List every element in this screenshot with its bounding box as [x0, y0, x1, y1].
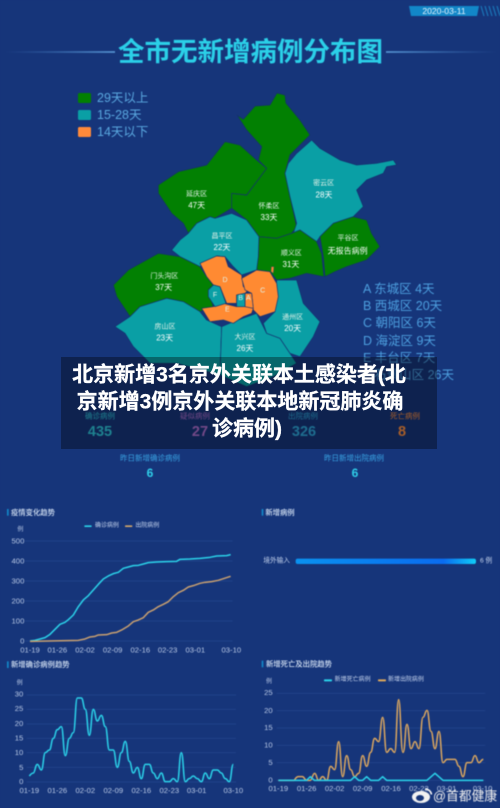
summary stats: 昨日新增确诊病例 — [120, 452, 180, 462]
district labels: 昌平区 — [212, 232, 232, 240]
district labels: 大兴区 — [235, 332, 255, 341]
district labels: 无报告病例 — [328, 245, 368, 255]
summary stats: 8 — [398, 424, 406, 440]
summary stats: 6 — [147, 466, 154, 480]
bar row — [263, 555, 493, 564]
summary stats: 死亡病例 — [390, 410, 420, 420]
headline overlay: 北京新增3名京外关联本土感染者(北 — [72, 362, 406, 386]
x axis — [269, 784, 492, 793]
panel: epidemic trend chart — [7, 508, 241, 654]
chart heading: 新增死亡及出院趋势 — [266, 659, 333, 668]
district labels: 37天 — [155, 283, 172, 292]
headline overlay — [61, 357, 437, 449]
x axis: 02-02 — [76, 786, 95, 795]
y axis: 0 — [268, 775, 273, 784]
district labels: 怀柔区 — [258, 201, 279, 210]
line: discharged — [30, 576, 231, 641]
title: 全市无新增病例分布图 — [118, 37, 383, 67]
district labels: 平谷区 — [337, 233, 358, 242]
chart heading: 新增病例 — [265, 508, 295, 517]
urban district list: B 西城区 20天 — [363, 299, 443, 313]
panel: new cases bar — [262, 508, 493, 564]
district labels: D — [222, 277, 228, 284]
urban district list: E 丰台区 7天 — [363, 350, 436, 365]
district labels: 22天 — [214, 243, 230, 252]
chart legend: 新增出院病例 — [388, 675, 424, 683]
district labels: 通州区 — [282, 312, 303, 321]
y axis: 0 — [19, 777, 23, 786]
y axis: 300 — [12, 576, 24, 585]
y axis: 10 — [15, 748, 23, 757]
map legend: 15-28天 — [97, 108, 142, 122]
line: new confirmed — [29, 698, 233, 782]
district: Xicheng — [237, 293, 245, 307]
district: Daxing — [220, 313, 297, 387]
chart legend — [84, 521, 159, 529]
panel: new deaths and discharges trend — [262, 659, 492, 793]
summary stats: 6 — [352, 466, 359, 480]
district labels: 23天 — [156, 333, 173, 342]
chart heading: 新增确诊病例趋势 — [11, 660, 70, 669]
enclave — [271, 267, 274, 273]
y axis — [264, 677, 273, 784]
icon: weibo — [412, 789, 432, 803]
x axis — [20, 645, 241, 654]
district labels: 33天 — [261, 213, 277, 222]
urban district list: D 海淀区 9天 — [363, 333, 436, 348]
district labels: 26天 — [237, 344, 253, 353]
y axis: 15 — [15, 733, 23, 742]
urban district list: F 石景山区 26天 — [363, 368, 454, 382]
district: Mentougou — [113, 253, 213, 317]
x axis: 02-23 — [160, 786, 179, 795]
chart legend: 出院病例 — [135, 521, 159, 529]
district: Tongzhou — [263, 280, 320, 357]
x axis: 01-19 — [20, 786, 39, 795]
watermark: Weibo: @首都健康 — [433, 788, 497, 804]
district labels: 20天 — [284, 324, 301, 333]
headline overlay: 诊病例) — [212, 418, 282, 440]
y axis: 例 — [17, 525, 23, 533]
summary stats — [85, 410, 420, 480]
district labels — [150, 178, 368, 353]
district: Fengtai — [202, 303, 253, 323]
district: Dongcheng — [245, 293, 253, 308]
district labels: 47天 — [188, 201, 205, 210]
district labels: 密云区 — [313, 178, 334, 187]
map of Beijing districts — [113, 93, 397, 387]
district labels: C — [260, 287, 265, 294]
summary stats: 确诊病例 — [85, 410, 115, 420]
urban district list: A 东城区 4天 — [363, 282, 435, 296]
x axis: 01-26 — [297, 784, 316, 793]
urban district list — [363, 282, 454, 382]
map legend — [78, 91, 148, 139]
y axis: 例 — [266, 677, 272, 685]
y axis: 25 — [264, 688, 273, 697]
x axis: 03-01 — [187, 786, 206, 795]
y axis: 15 — [264, 723, 273, 732]
x axis: 01-19 — [20, 645, 40, 654]
district: Shijingshan — [208, 285, 226, 307]
x axis: 02-16 — [381, 784, 401, 793]
x axis: 03-01 — [186, 645, 205, 654]
x axis: 02-16 — [131, 645, 150, 654]
district labels: E — [225, 306, 230, 313]
x axis: 02-09 — [104, 786, 123, 795]
chart legend: 确诊病例 — [95, 521, 119, 529]
district: Shunyi — [257, 230, 324, 280]
district: Haidian — [200, 256, 248, 303]
summary stats: 昨日新增出院病例 — [324, 452, 384, 462]
summary stats: 27 — [192, 424, 208, 440]
y axis: 25 — [15, 704, 23, 713]
district: Huairou — [232, 93, 310, 238]
y axis: 0 — [20, 636, 24, 645]
y axis: 例 — [17, 678, 23, 686]
district: Changping — [172, 213, 259, 275]
bar row: 6 例 — [480, 555, 493, 564]
district labels: F — [213, 292, 217, 299]
y axis: 500 — [12, 536, 24, 545]
y axis: 100 — [12, 616, 24, 625]
x axis: 02-09 — [103, 645, 122, 654]
x axis: 02-02 — [75, 645, 95, 654]
map legend: 29天以上 — [97, 91, 148, 105]
x axis: 03-01 — [437, 784, 456, 793]
x axis — [20, 786, 243, 795]
x axis: 02-09 — [353, 784, 372, 793]
summary stats: 出院病例 — [288, 410, 318, 420]
summary stats: 疑似病例 — [180, 410, 210, 420]
date badge — [409, 6, 500, 16]
y axis — [15, 678, 23, 786]
line: new deaths — [278, 773, 483, 780]
y axis: 20 — [264, 706, 273, 715]
chart heading: 疫情变化趋势 — [11, 508, 56, 517]
y axis: 200 — [12, 596, 24, 605]
district labels: 顺义区 — [281, 249, 302, 257]
district labels: 延庆区 — [186, 189, 207, 198]
chart legend: 新增死亡病例 — [335, 675, 371, 683]
urban district list: C 朝阳区 6天 — [363, 316, 436, 330]
line: confirmed — [30, 555, 231, 641]
y axis: 5 — [268, 758, 273, 767]
district labels: 28天 — [316, 190, 332, 199]
line: new discharged — [278, 700, 483, 780]
x axis: 02-23 — [409, 784, 429, 793]
y axis — [12, 525, 24, 645]
x axis: 03-10 — [473, 784, 492, 793]
district: Chaoyang — [242, 270, 278, 317]
district: Fangshan — [115, 298, 222, 375]
summary stats: 326 — [292, 424, 316, 440]
date badge: 2020-03-11 — [422, 6, 466, 16]
panel: new confirmed trend — [7, 660, 243, 795]
headline overlay: 京新增3例京外关联本地新冠肺炎确 — [77, 390, 403, 414]
bar row: 境外输入 — [263, 555, 290, 564]
district labels: A — [246, 295, 251, 302]
x axis: 02-16 — [132, 786, 151, 795]
x axis: 02-23 — [158, 645, 177, 654]
district labels: 房山区 — [155, 321, 175, 330]
district labels: 31天 — [283, 260, 299, 269]
y axis: 10 — [264, 740, 273, 749]
x axis: 02-02 — [325, 784, 344, 793]
y axis: 5 — [19, 763, 23, 772]
y axis: 20 — [15, 719, 23, 728]
district: Yanqing — [158, 142, 267, 233]
y axis: 30 — [15, 689, 23, 698]
x axis: 01-26 — [48, 786, 67, 795]
x axis: 03-10 — [222, 645, 241, 654]
map legend: 14天以下 — [97, 125, 148, 139]
y axis: 400 — [12, 556, 24, 565]
district: Pinggu — [320, 217, 380, 277]
summary stats: 435 — [88, 424, 112, 440]
x axis: 03-10 — [224, 786, 243, 795]
district: Miyun — [285, 140, 397, 242]
chart legend — [324, 675, 424, 683]
district labels: 门头沟区 — [150, 271, 178, 280]
x axis: 01-26 — [48, 645, 67, 654]
district labels: B — [238, 295, 243, 302]
x axis: 01-19 — [269, 784, 288, 793]
